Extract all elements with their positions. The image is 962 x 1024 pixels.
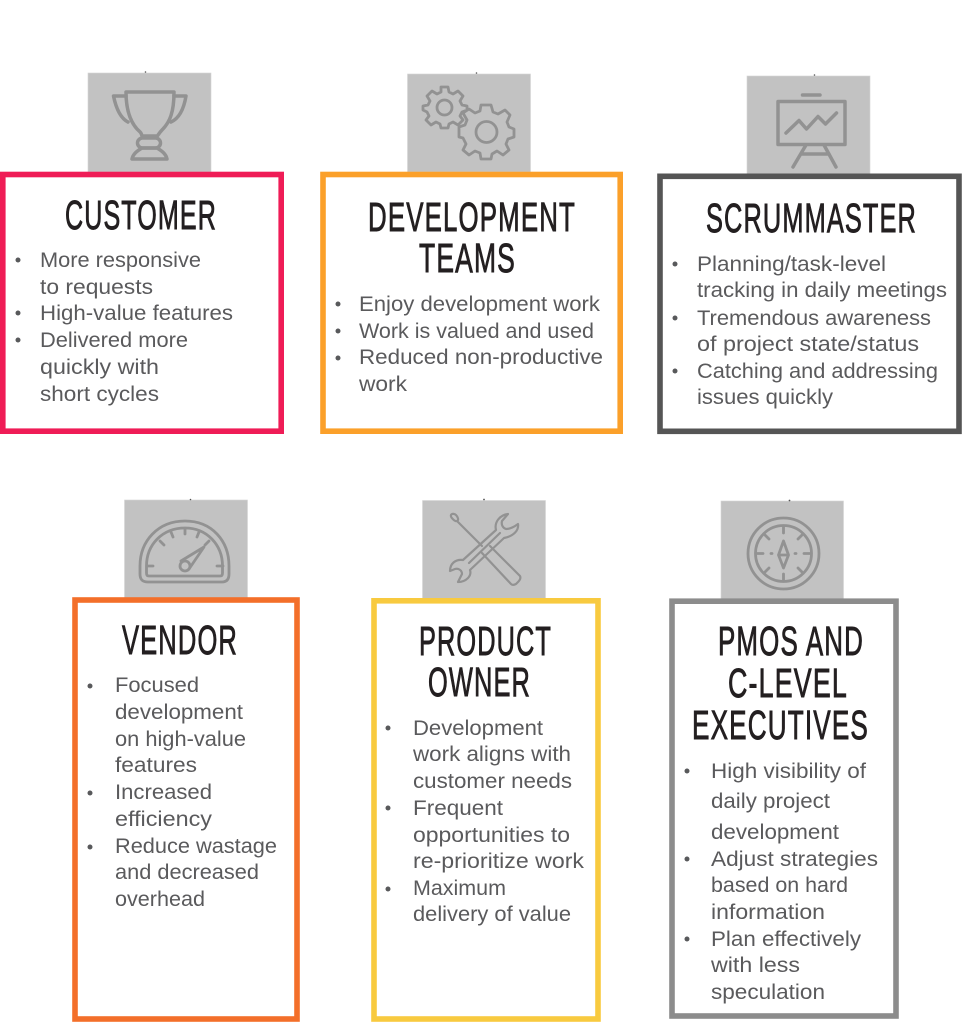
text block: scrummaster benefits: tracking in daily meetings [697, 279, 947, 302]
text block: customer benefits [16, 249, 233, 406]
text block: product owner benefits: opportunities to [413, 824, 570, 847]
icon: compass [721, 500, 844, 599]
heading: product owner: OWNER [428, 659, 531, 705]
text block: product owner benefits: delivery of value [413, 903, 571, 926]
text block: product owner benefits: Development [413, 717, 543, 740]
text block: PMOs and C-level executives benefits: based on hard [711, 874, 848, 897]
heading: product owner [419, 618, 552, 705]
text block: vendor benefits: Focused [115, 674, 199, 697]
text block: product owner benefits: work aligns with [412, 743, 571, 766]
text block: product owner benefits [386, 717, 585, 926]
text block: vendor benefits: on high-value [115, 728, 246, 751]
text block: vendor benefits [88, 674, 277, 911]
text block: PMOs and C-level executives benefits: speculation [711, 981, 825, 1004]
heading: vendor: VENDOR [122, 617, 238, 663]
text block: development teams benefits: work [358, 373, 408, 396]
text block: customer benefits: to requests [40, 276, 153, 299]
panel: development teams [323, 72, 620, 431]
heading: PMOs and C-level executives: C-LEVEL [728, 660, 848, 706]
text block: customer benefits: Delivered more [40, 329, 188, 352]
heading: development teams: DEVELOPMENT [368, 194, 576, 240]
text block: development teams benefits [336, 293, 603, 396]
text block: vendor benefits: efficiency [115, 808, 213, 831]
text block: product owner benefits: re-prioritize work [413, 850, 585, 873]
text block: PMOs and C-level executives benefits: Plan effectively [711, 928, 862, 951]
panel: scrummaster [660, 74, 959, 431]
text block: product owner benefits: Frequent [413, 797, 503, 820]
heading: PMOs and C-level executives: PMOS AND [718, 618, 864, 664]
text block: PMOs and C-level executives benefits [684, 760, 878, 1004]
text block: customer benefits: High-value features [40, 302, 233, 325]
text block: PMOs and C-level executives benefits: with less [710, 954, 800, 977]
text block: PMOs and C-level executives benefits: daily project [711, 790, 830, 813]
icon: trophy [88, 71, 211, 172]
icon: crossed tools [422, 499, 546, 598]
text block: PMOs and C-level executives benefits: development [711, 821, 839, 844]
text block: PMOs and C-level executives benefits: High visibility of [711, 760, 866, 783]
text block: scrummaster benefits [672, 253, 947, 409]
text block: scrummaster benefits: Catching and addressing [697, 360, 938, 383]
panel: customer [3, 71, 281, 431]
text block: scrummaster benefits: issues quickly [697, 386, 834, 409]
text block: scrummaster benefits: Planning/task-level [697, 253, 886, 276]
panel: vendor [75, 499, 297, 1019]
text block: customer benefits: More responsive [40, 249, 201, 272]
text block: vendor benefits: Increased [115, 781, 212, 804]
text block: development teams benefits: Work is valued and used [359, 320, 594, 343]
icon: speedometer [124, 499, 248, 598]
text block: development teams benefits: Enjoy development work [359, 293, 601, 316]
text block: customer benefits: quickly with [40, 356, 159, 379]
text block: development teams benefits: Reduced non-productive [359, 346, 603, 369]
text block: product owner benefits: customer needs [413, 770, 572, 793]
heading: PMOs and C-level executives [692, 618, 869, 748]
heading: PMOs and C-level executives: EXECUTIVES [692, 702, 869, 748]
icon: presentation board [747, 74, 870, 174]
text block: vendor benefits: Reduce wastage [115, 835, 277, 858]
text block: vendor benefits: overhead [115, 888, 205, 911]
text block: customer benefits: short cycles [40, 383, 159, 406]
heading: customer: CUSTOMER [65, 192, 217, 238]
text block: scrummaster benefits: Tremendous awareness [697, 307, 931, 330]
text block: vendor benefits: development [115, 701, 243, 724]
heading: development teams: TEAMS [419, 235, 516, 281]
text block: product owner benefits: Maximum [413, 877, 506, 900]
heading: product owner: PRODUCT [419, 618, 552, 664]
text block: PMOs and C-level executives benefits: information [711, 901, 825, 924]
icon: gears [408, 72, 530, 172]
text block: vendor benefits: and decreased [115, 861, 259, 884]
text block: scrummaster benefits: of project state/status [697, 333, 919, 356]
heading: development teams [368, 194, 576, 281]
panel: PMOs and C-level executives [672, 500, 896, 1016]
panel: product owner [374, 499, 598, 1019]
text block: vendor benefits: features [115, 754, 197, 777]
text block: PMOs and C-level executives benefits: Adjust strategies [711, 848, 878, 871]
